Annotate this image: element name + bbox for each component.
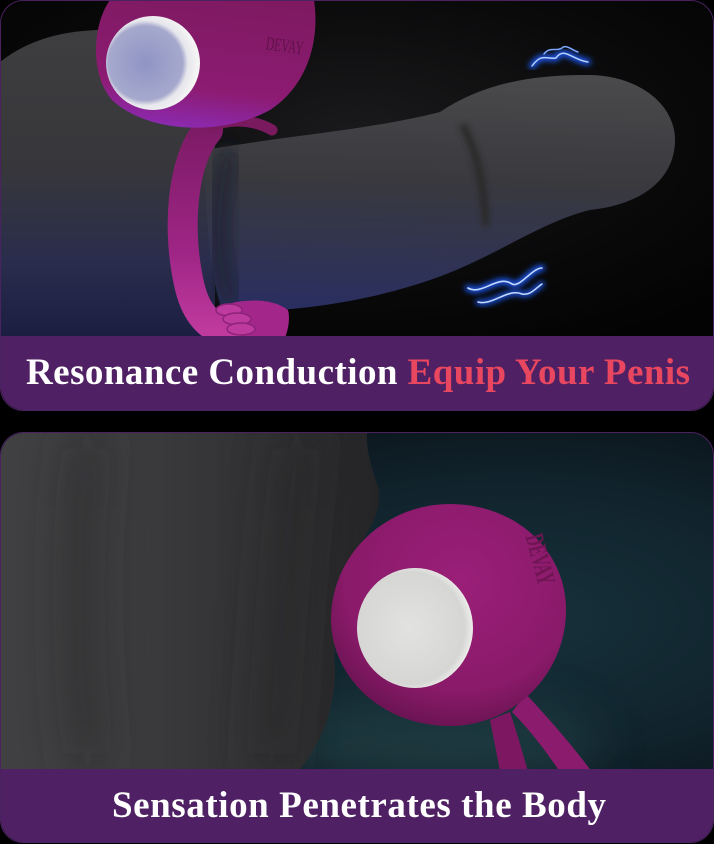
lower glow [300, 700, 590, 769]
vibration mark: top [532, 47, 588, 66]
ridge shadow [462, 125, 486, 226]
background [328, 433, 713, 766]
brand emboss: DEVAY [520, 530, 561, 588]
vibrator head [331, 504, 566, 726]
heading: sensation: Sensation Penetrates the Body [112, 785, 606, 826]
ring [183, 130, 226, 332]
button [357, 568, 473, 688]
heading: resonance conduction: Resonance Conduction Equip Your Penis [26, 352, 690, 393]
ring beads [216, 304, 255, 335]
background [0, 0, 714, 336]
shaft form [205, 75, 675, 311]
caption band [0, 336, 714, 411]
rabbit ears [490, 712, 528, 772]
shaft shade [219, 150, 232, 305]
body fold shadows [74, 477, 89, 694]
button [106, 16, 200, 110]
body form [0, 433, 379, 769]
panel: sensation penetrates [0, 432, 714, 844]
vibration mark: bottom [468, 268, 542, 303]
brand emboss: DEVAY [265, 33, 305, 60]
vibrator housing [96, 0, 315, 128]
ring lower lobe [216, 300, 289, 336]
ring inner edge [212, 121, 272, 130]
panel: resonance conduction [0, 0, 714, 411]
body form [0, 30, 215, 336]
caption band [0, 769, 714, 844]
